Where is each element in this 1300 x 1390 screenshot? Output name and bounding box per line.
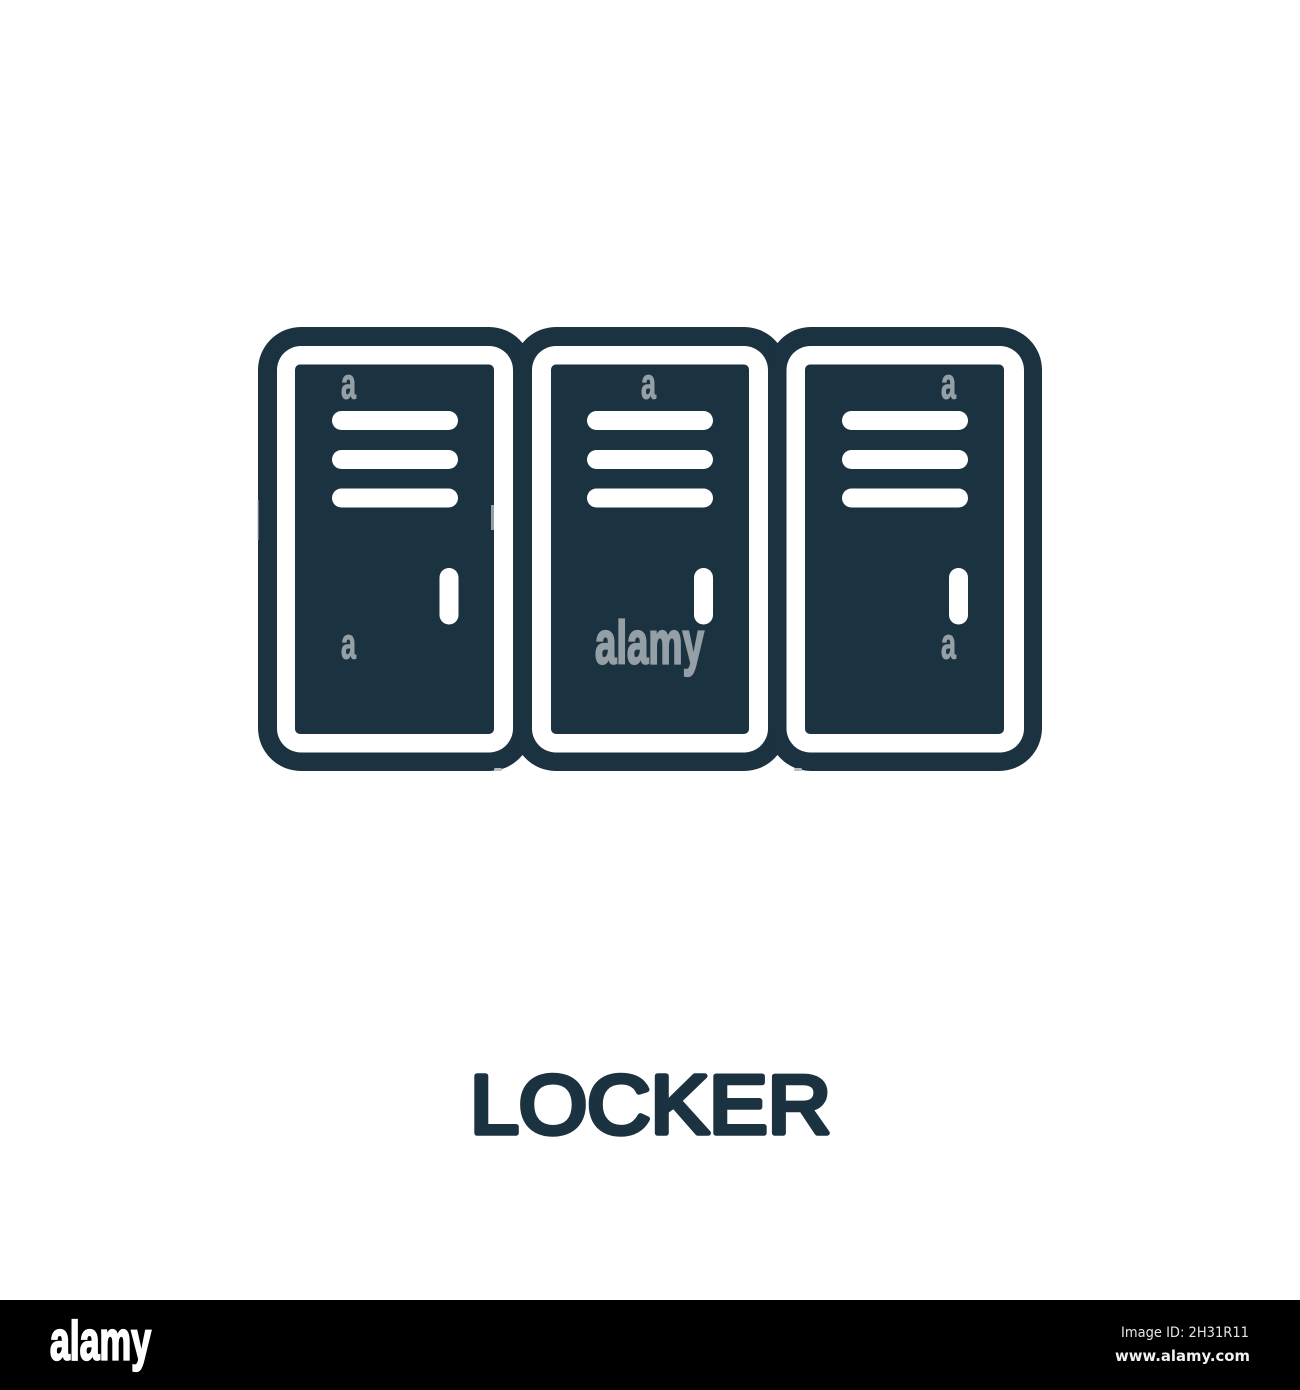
website: www.alamy.com [1115, 1347, 1250, 1365]
watermark: small repeated marks: a [641, 360, 656, 408]
footer bar [0, 1300, 1300, 1390]
watermark: small repeated marks: a [941, 360, 956, 408]
locker 1 [258, 327, 532, 771]
title: locker: LOCKER [470, 1058, 831, 1151]
watermark: centre logo: alamy [595, 610, 704, 676]
watermark: small repeated marks: a [341, 620, 356, 668]
watermark: small repeated marks [258, 360, 956, 771]
locker 2 [513, 327, 787, 771]
footer logo: alamy [50, 1310, 151, 1372]
icon: three lockers [258, 327, 1042, 771]
locker 3 [768, 327, 1042, 771]
watermark: small repeated marks: a [941, 620, 956, 668]
watermark: small repeated marks: a [341, 360, 356, 408]
image id: Image ID: 2H31R11 [1121, 1325, 1249, 1341]
